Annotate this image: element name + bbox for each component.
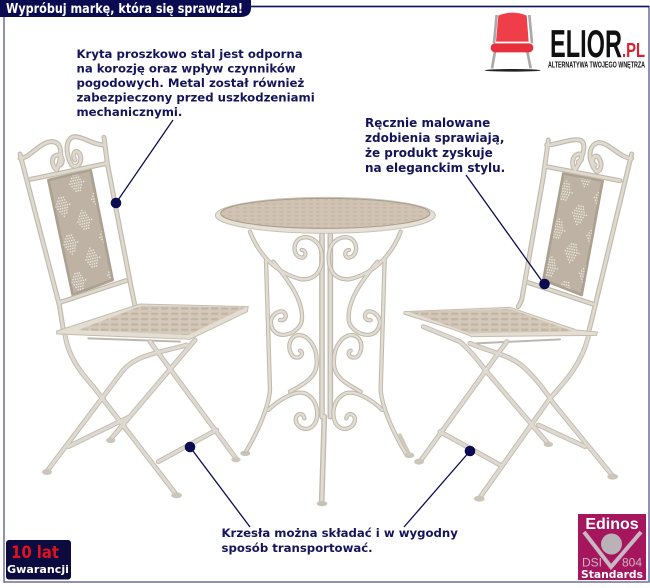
leader line and dot [111, 120, 173, 208]
chair backrest [20, 137, 135, 330]
leader line right and dot [404, 446, 475, 527]
callout text: że produkt zyskuje [365, 146, 493, 160]
callout text: pogodowych. Metal został również [76, 76, 304, 90]
callout text: sposób transportować. [222, 541, 373, 555]
callout text: zabezpieczony przed uszkodzeniami [76, 90, 315, 104]
chair seat [57, 304, 248, 339]
badge: 10 years warranty: Gwarancji [7, 563, 69, 576]
badge: Edinos standards [578, 514, 646, 581]
chair legs [42, 335, 241, 498]
callout text: zdobienia sprawiają, [365, 131, 504, 145]
callout: folding chairs [185, 442, 475, 555]
left chair [20, 137, 248, 498]
callout text: Ręcznie malowane [365, 116, 490, 130]
callout text: na korozję oraz wpływ czynników [76, 62, 296, 76]
right chair [400, 140, 632, 502]
badge: Edinos standards: 804 [622, 556, 642, 570]
chair backrest [518, 140, 632, 333]
header banner: Wypróbuj markę, która się sprawdza! [6, 2, 243, 17]
callout: hand-painted decorations [365, 116, 550, 289]
badge: Edinos standards: Standards [581, 569, 643, 581]
callout: powder-coated steel [76, 47, 319, 208]
table top [215, 197, 435, 233]
round table [215, 197, 435, 506]
callout text: Kryta proszkowo stal jest odporna [76, 47, 303, 61]
chair legs [400, 327, 618, 502]
brand logo: Elior.pl [485, 13, 645, 72]
icon: red chair [485, 13, 541, 72]
callout text: mechanicznymi. [76, 105, 182, 119]
badge: 10 years warranty: 10 lat [11, 543, 59, 563]
callout text: na eleganckim stylu. [365, 161, 505, 175]
chair seat [404, 307, 597, 337]
callout text: Krzesła można składać i w wygodny [222, 526, 458, 540]
badge: Edinos standards: Edinos [585, 516, 639, 533]
badge: 10 years warranty [6, 540, 71, 580]
badge: Edinos standards: DSI [582, 556, 602, 570]
leader line and dot [466, 175, 550, 289]
leader line left and dot [185, 442, 250, 527]
table legs and scrolls [240, 232, 414, 506]
